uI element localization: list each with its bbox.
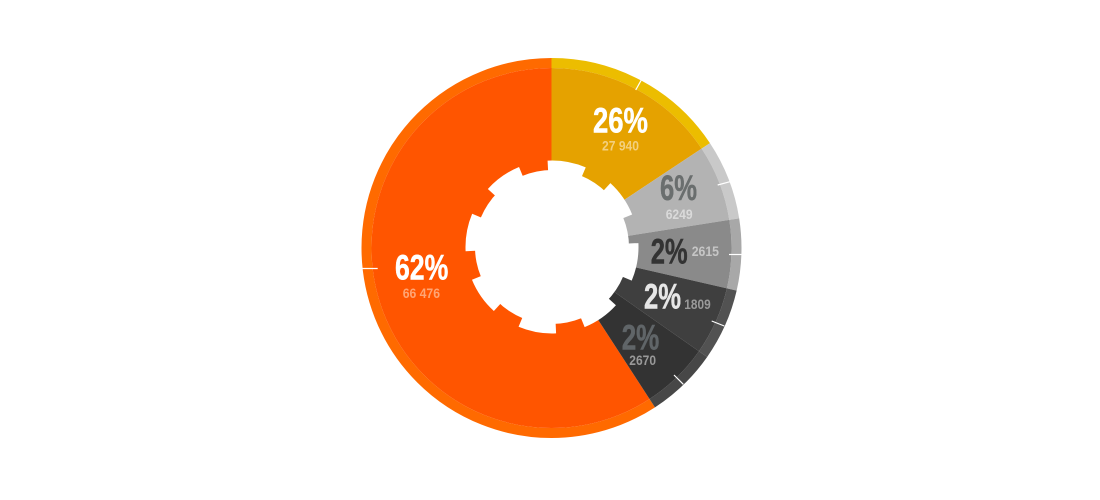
- label: 62%: [395, 248, 448, 301]
- label: 2% (2615): 2615: [692, 243, 719, 259]
- label: 2% (1809): 1809: [684, 296, 711, 312]
- label: 2% (2615): 2%: [651, 232, 688, 271]
- inner donut segments: [426, 123, 676, 373]
- label: 62%: 66 476: [403, 285, 440, 301]
- label: 2% (1809): 2%: [644, 277, 681, 316]
- white gear-shaped centre: [467, 162, 637, 332]
- label: 2% (2670): 2%: [622, 318, 659, 357]
- label: 2% (2670): [622, 318, 659, 368]
- tick marks: [362, 79, 742, 384]
- label: 6%: 6249: [666, 206, 693, 222]
- label: 6%: 6%: [660, 169, 697, 208]
- label: 26%: [593, 102, 648, 154]
- label: 26%: 27 940: [602, 138, 639, 154]
- label: 26%: 26%: [593, 102, 648, 141]
- label: 62%: 62%: [395, 248, 448, 287]
- label: 6%: [660, 169, 697, 222]
- label: 2% (2670): 2670: [629, 352, 656, 368]
- outer ring segments: [366, 63, 736, 433]
